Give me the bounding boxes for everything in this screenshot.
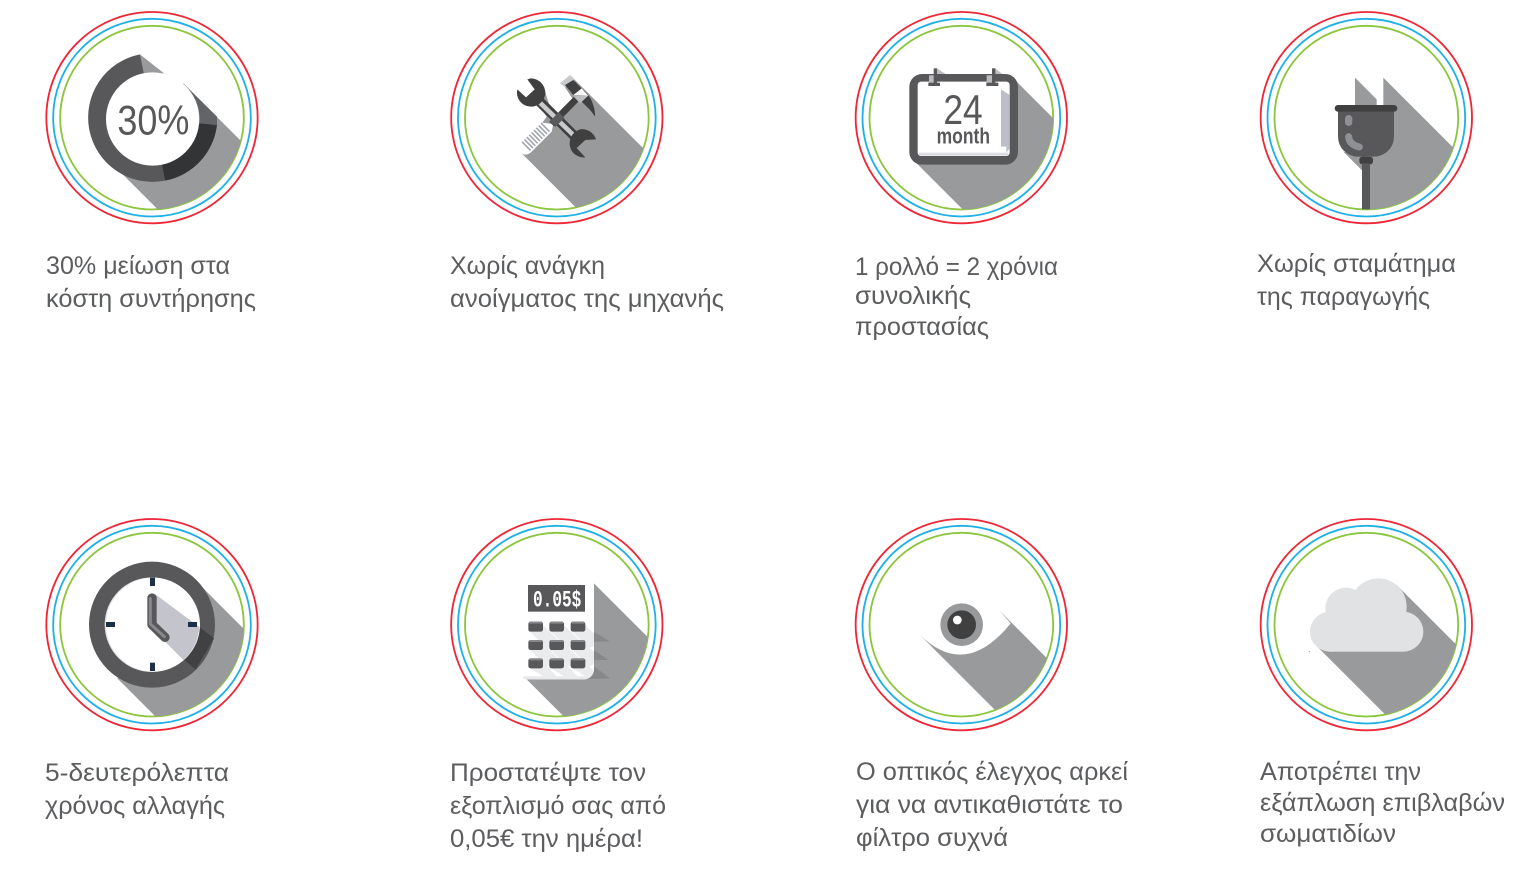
text: visual inspection — [856, 758, 1128, 852]
icon: 24 month calendar: 24 — [943, 86, 983, 133]
text: protect your equipment — [450, 759, 666, 853]
icon: 30% donut: 30% — [117, 96, 189, 143]
text: prevents spread of particles: σωματιδίων — [1260, 820, 1396, 848]
calculator keypad — [528, 622, 594, 678]
icon: eye — [854, 518, 1068, 732]
text: 30% cost reduction: 30% μείωση στα — [46, 252, 230, 280]
icon: wrench and hammer — [450, 11, 664, 224]
panel: visual inspection — [856, 519, 1128, 852]
text: 1 roll equals 2 years: 1 ρολλό = 2 χρόνια — [855, 253, 1058, 281]
panel: 1 roll equals 2 years — [854, 11, 1068, 340]
panel: prevents spread of particles — [1260, 519, 1517, 848]
text: 5 second change time: χρόνος αλλαγής — [45, 792, 225, 820]
text: no need to open the machine: Χωρίς ανάγκη — [450, 252, 605, 280]
icon: calculator — [450, 518, 664, 732]
icon: 24 month calendar: month — [937, 123, 990, 148]
text: protect your equipment: 0,05€ την ημέρα! — [450, 825, 643, 853]
panel: protect your equipment — [450, 518, 665, 852]
icon: 30% donut — [45, 11, 259, 224]
text: 5 second change time: 5-δευτερόλεπτα — [45, 759, 229, 787]
icon: plug — [1260, 11, 1473, 224]
icon: clock — [45, 518, 259, 732]
text: 1 roll equals 2 years: προστασίας — [855, 313, 989, 341]
text: no production stop: Χωρίς σταμάτημα — [1257, 250, 1456, 278]
panel: no need to open the machine — [450, 12, 724, 313]
text: protect your equipment: εξοπλισμό σας από — [450, 792, 666, 820]
text: 5 second change time — [45, 759, 229, 820]
text: prevents spread of particles — [1260, 758, 1505, 848]
text: visual inspection: για να αντικαθιστάτε το — [856, 791, 1123, 819]
text: no need to open the machine: ανοίγματος της μηχανής — [450, 285, 724, 313]
text: 1 roll equals 2 years: συνολικής — [855, 282, 971, 310]
icon: cloud — [1260, 518, 1473, 732]
text: no need to open the machine — [450, 252, 724, 313]
panel: no production stop — [1257, 11, 1473, 310]
text: prevents spread of particles: Αποτρέπει την — [1260, 758, 1421, 786]
icon: 24 month calendar — [854, 11, 1068, 224]
text: visual inspection: Ο οπτικός έλεγχος αρκεί — [856, 758, 1128, 786]
text: no production stop: της παραγωγής — [1257, 283, 1430, 311]
icon: calculator: 0.05$ — [533, 587, 581, 613]
text: 30% cost reduction — [46, 252, 256, 313]
text: 1 roll equals 2 years — [855, 253, 1058, 341]
panel: 30% cost reduction — [45, 11, 259, 312]
hammer handle, striped — [521, 123, 553, 155]
text: visual inspection: φίλτρο συχνά — [856, 824, 1008, 852]
panel: 5 second change time — [45, 518, 259, 819]
text: protect your equipment: Προστατέψτε τον — [450, 759, 646, 787]
text: 30% cost reduction: κόστη συντήρησης — [46, 285, 256, 313]
text: no production stop — [1257, 250, 1456, 311]
text: prevents spread of particles: εξάπλωση επιβλαβών — [1260, 789, 1505, 817]
